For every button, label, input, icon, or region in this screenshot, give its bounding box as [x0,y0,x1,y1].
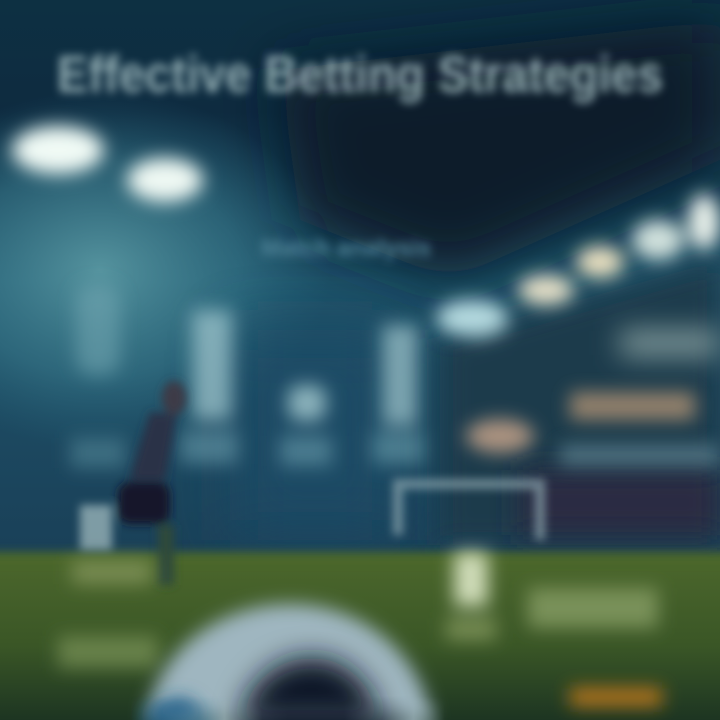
background: stadium night sky [0,0,720,560]
soccer ball [130,604,445,720]
subtitle: Match analysis [261,235,431,262]
title: Effective Betting Strategies [57,46,663,104]
grass pitch [0,552,720,720]
player silhouette [80,381,186,585]
stadium lights right [436,194,720,336]
strategy columns [70,285,512,468]
floodlights left [12,126,203,202]
stadium stands [440,260,720,545]
goal frame [398,484,540,540]
pitch labels [58,552,662,706]
